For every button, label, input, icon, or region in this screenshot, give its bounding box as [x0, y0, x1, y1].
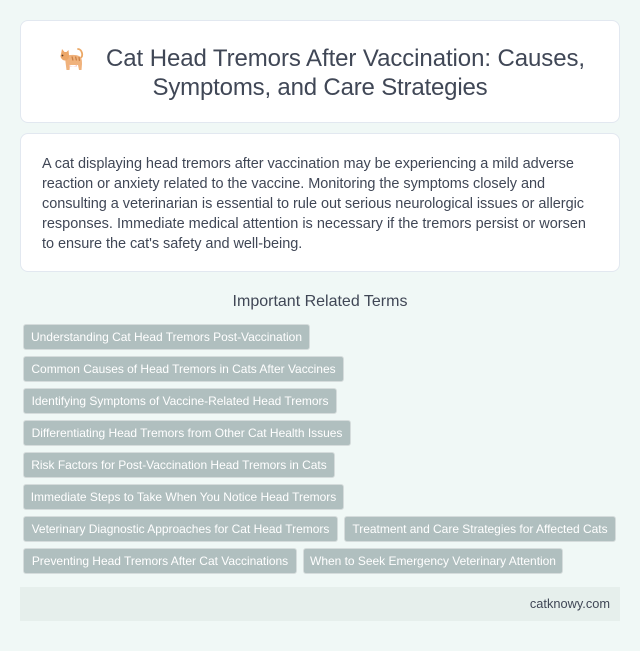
text block: description: consulting a veterinarian is essential to rule out serious neurological issues or allergic — [42, 196, 584, 212]
tag — [23, 324, 310, 350]
tag — [23, 516, 338, 542]
tag: Identifying Symptoms of Vaccine-Related Head Tremors — [32, 394, 328, 408]
footer bar — [20, 587, 620, 621]
heading: important related terms: Important Related Terms — [233, 293, 407, 310]
tag: Common Causes of Head Tremors in Cats After Vaccines — [31, 362, 336, 376]
tag — [23, 452, 335, 478]
heading: title: Cat Head Tremors After Vaccination: Causes, — [106, 45, 585, 72]
tag — [23, 484, 344, 510]
text block: description: reaction or anxiety related to the vaccine. Monitoring the symptoms closely and — [42, 176, 545, 192]
heading: title: Symptoms, and Care Strategies — [153, 74, 487, 101]
tag — [303, 548, 563, 574]
tag: When to Seek Emergency Veterinary Attention — [310, 554, 556, 568]
tag list — [23, 324, 616, 574]
heading: title — [106, 45, 585, 101]
text block: description: responses. Immediate medical attention is necessary if the tremors persist or worsen — [42, 216, 586, 232]
tag: Risk Factors for Post-Vaccination Head Tremors in Cats — [31, 458, 327, 472]
tag: Differentiating Head Tremors from Other Cat Health Issues — [32, 426, 342, 440]
text block: description: A cat displaying head tremors after vaccination may be experiencing a mild adverse — [42, 156, 574, 172]
panel: title card — [20, 20, 620, 123]
tag: Understanding Cat Head Tremors Post-Vaccination — [31, 330, 302, 344]
tag: Preventing Head Tremors After Cat Vaccinations — [32, 554, 288, 568]
tag — [344, 516, 616, 542]
text block: description — [42, 156, 586, 252]
tag — [23, 356, 344, 382]
tag — [23, 420, 351, 446]
tag — [23, 548, 297, 574]
tag: Veterinary Diagnostic Approaches for Cat Head Tremors — [32, 522, 329, 536]
panel: description card — [20, 133, 620, 272]
text block: description: to ensure the cat's safety and well-being. — [42, 236, 302, 252]
tag: Immediate Steps to Take When You Notice Head Tremors — [31, 490, 336, 504]
tag — [23, 388, 337, 414]
tag: Treatment and Care Strategies for Affected Cats — [352, 522, 608, 536]
icon: cat — [60, 48, 84, 70]
footer text: site name: catknowy.com — [530, 596, 610, 611]
